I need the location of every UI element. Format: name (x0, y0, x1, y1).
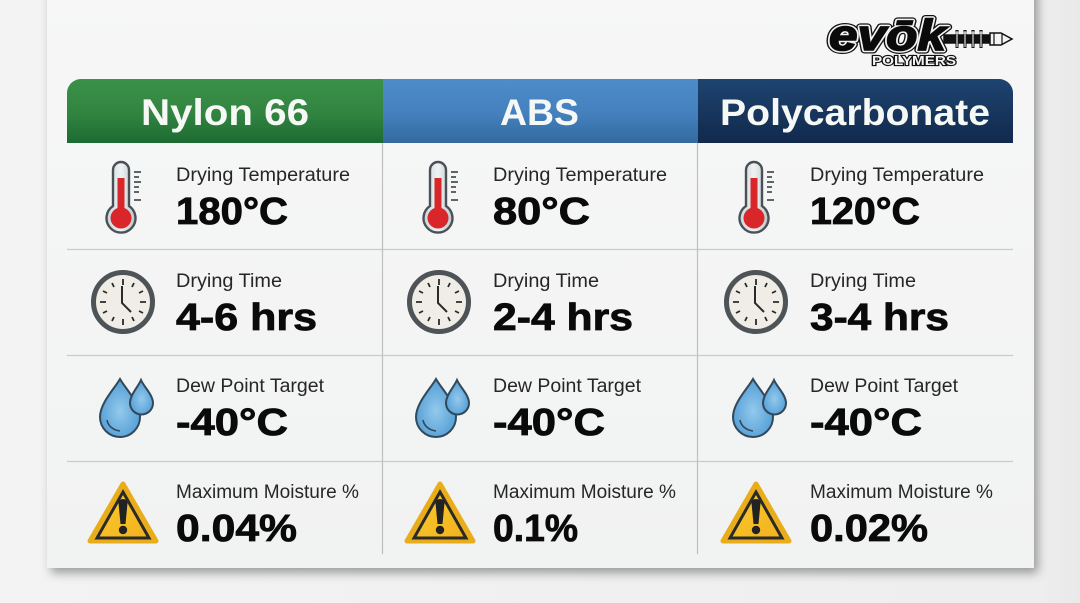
logo: evok polymers: evōk (829, 11, 949, 60)
label: Maximum Moisture %: Maximum Moisture % (810, 482, 993, 503)
value: 4-6 hrs: 4-6 hrs (176, 297, 317, 339)
value: 80°C: 80°C (493, 191, 590, 233)
header: ABS: ABS (500, 92, 579, 133)
column: Nylon 66 (90, 162, 359, 550)
value: 180°C: 180°C (176, 191, 288, 233)
logo: evok polymers (829, 11, 1012, 68)
icon: water drops (416, 379, 469, 437)
icon: clock (410, 272, 468, 332)
value: 2-4 hrs: 2-4 hrs (493, 297, 633, 339)
logo: evok polymers: POLYMERS (872, 54, 956, 68)
label: Drying Temperature: Drying Temperature (493, 165, 667, 186)
logo: evok polymers: evōk (829, 11, 949, 60)
value: -40°C: -40°C (810, 402, 922, 444)
header: ABS (383, 79, 698, 143)
value: -40°C: -40°C (176, 402, 288, 444)
header: Nylon 66: Nylon 66 (141, 92, 309, 133)
value: -40°C: -40°C (493, 402, 605, 444)
icon: thermometer (740, 162, 774, 233)
header: Polycarbonate (698, 79, 1013, 143)
label: Drying Time: Drying Time (493, 271, 599, 292)
label: Dew Point Target: Dew Point Target (493, 376, 642, 397)
label: Dew Point Target: Dew Point Target (810, 376, 959, 397)
logo: evok polymers: evōk (829, 11, 949, 60)
icon: clock (94, 272, 152, 332)
label: Maximum Moisture %: Maximum Moisture % (176, 482, 359, 503)
label: Dew Point Target: Dew Point Target (176, 376, 325, 397)
value: 0.1%: 0.1% (493, 508, 578, 550)
value: 3-4 hrs: 3-4 hrs (810, 297, 949, 339)
header: Polycarbonate: Polycarbonate (720, 92, 990, 133)
icon: warning triangle (90, 484, 156, 541)
label: Maximum Moisture %: Maximum Moisture % (493, 482, 676, 503)
icon: water drops (733, 379, 786, 437)
icon: thermometer (106, 162, 141, 233)
icon: clock (726, 272, 786, 332)
icon: water drops (100, 379, 153, 437)
header: Nylon 66 (67, 79, 383, 143)
icon: warning triangle (723, 484, 789, 541)
icon: thermometer (424, 162, 458, 233)
column: ABS (407, 162, 676, 550)
value: 0.04%: 0.04% (176, 508, 297, 550)
label: Drying Temperature: Drying Temperature (176, 165, 350, 186)
column: Polycarbonate (723, 162, 993, 550)
value: 0.02%: 0.02% (810, 508, 928, 550)
label: Drying Temperature: Drying Temperature (810, 165, 984, 186)
label: Drying Time: Drying Time (810, 271, 916, 292)
value: 120°C: 120°C (810, 191, 920, 233)
icon: warning triangle (407, 484, 473, 541)
label: Drying Time: Drying Time (176, 271, 282, 292)
